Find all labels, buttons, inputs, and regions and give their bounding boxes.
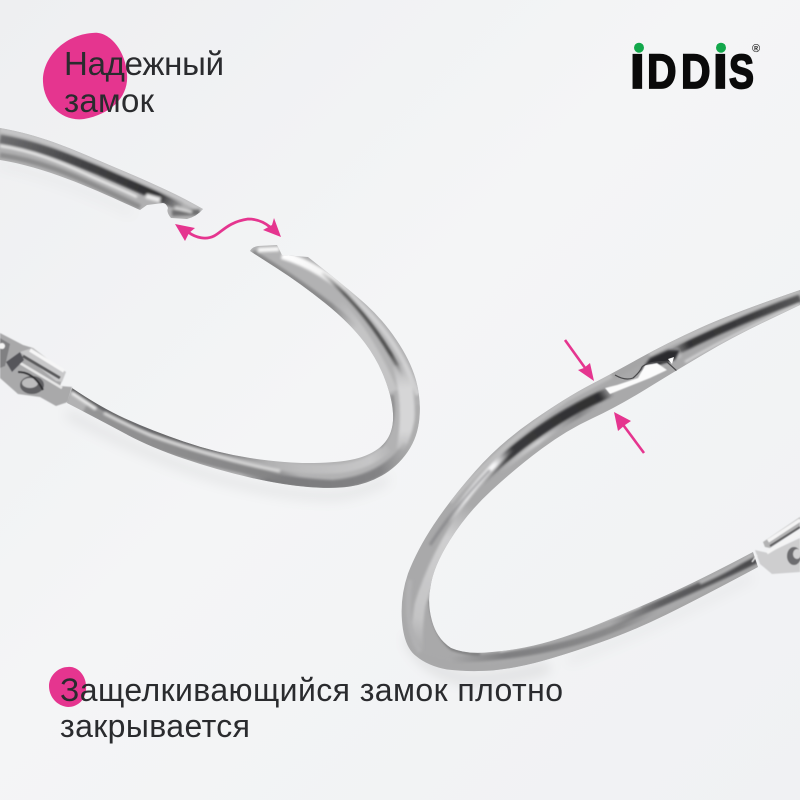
- arrow: opening of the lock: [175, 218, 281, 241]
- heading: Надежный: [64, 45, 224, 82]
- photo: opened ring, upper end with lock notch: [0, 128, 203, 219]
- heading: замок: [64, 82, 155, 119]
- photo: closed ring with lock: [395, 285, 800, 675]
- logo: IDDIS: [630, 43, 760, 99]
- logo: IDDIS: ®: [752, 43, 760, 55]
- logo: IDDIS: I: [713, 44, 728, 98]
- arrow: lower pointer to closed lock: [614, 412, 644, 453]
- logo: IDDIS: D: [681, 46, 710, 99]
- accent blob: caption: [49, 667, 86, 707]
- caption: закрывается: [60, 708, 250, 744]
- accent blob: heading: [43, 33, 127, 119]
- photo shadows under rings: [0, 165, 750, 680]
- logo: IDDIS: S: [729, 46, 754, 99]
- arrow: upper pointer to closed lock: [565, 340, 594, 381]
- logo: IDDIS: I: [630, 44, 645, 98]
- caption: Защелкивающийся замок плотно: [60, 672, 563, 708]
- photo: left hinge: [0, 333, 72, 406]
- logo: IDDIS: D: [647, 46, 676, 99]
- photo: opened ring, lower arc with hook: [60, 240, 425, 495]
- photo: right hinge: [752, 517, 800, 574]
